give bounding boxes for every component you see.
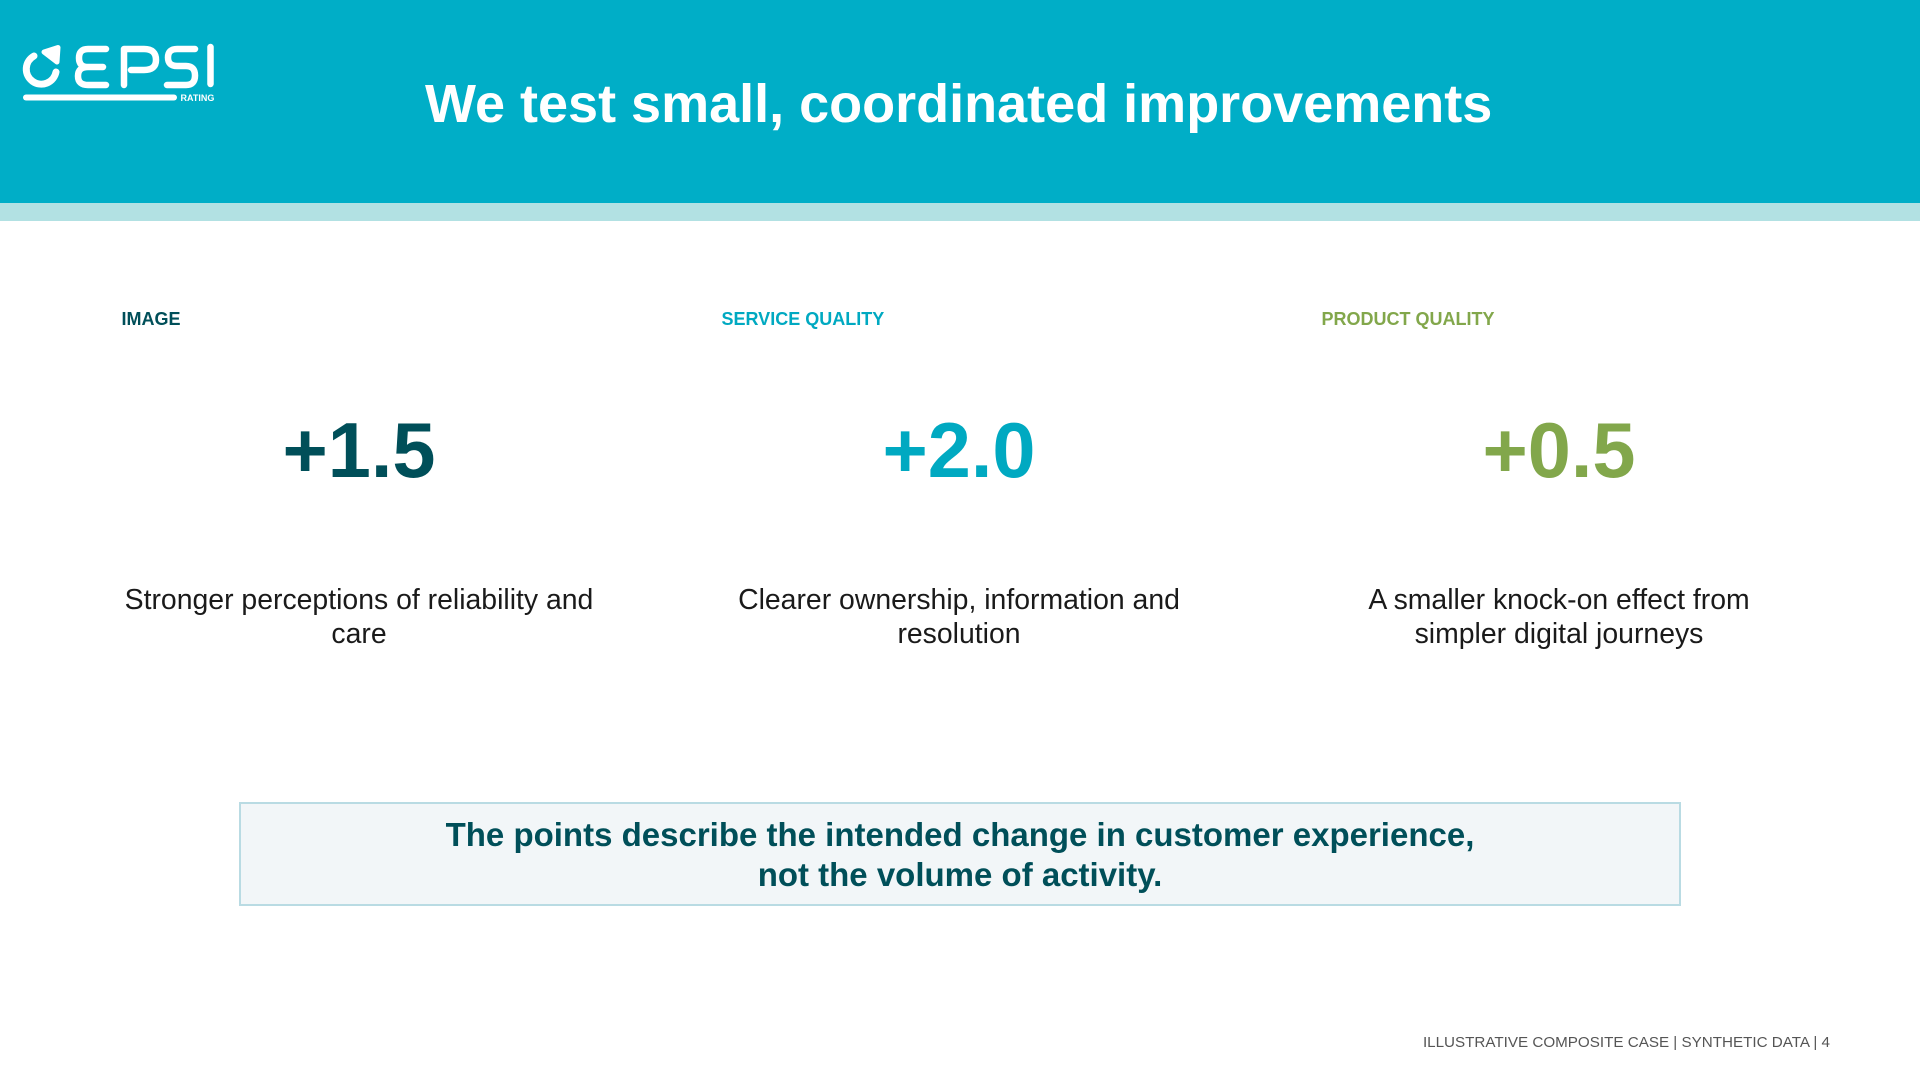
callout: The points describe the intended change in customer experience, [446, 816, 1474, 853]
image value: +1.5 [282, 408, 436, 494]
product quality description: A smaller knock-on effect from [1368, 584, 1750, 616]
image description: Stronger perceptions of reliability and [125, 584, 593, 616]
service quality label: SERVICE QUALITY [722, 309, 884, 329]
callout [239, 802, 1681, 906]
image description: care [331, 618, 387, 650]
title: We test small, coordinated improvements [425, 74, 1492, 134]
callout: not the volume of activity. [758, 856, 1162, 893]
service quality description [738, 584, 1180, 650]
image label: IMAGE [122, 309, 181, 329]
icon: logo mark [26, 48, 58, 84]
service quality description: Clearer ownership, information and [738, 584, 1180, 616]
footer: ILLUSTRATIVE COMPOSITE CASE | SYNTHETIC DATA | 4 [1423, 1034, 1830, 1051]
product quality label: PRODUCT QUALITY [1322, 309, 1494, 329]
product quality value: +0.5 [1482, 408, 1636, 494]
service quality description: resolution [897, 618, 1021, 650]
product quality description: simpler digital journeys [1415, 618, 1703, 650]
image description [125, 584, 593, 650]
logo [22, 44, 214, 103]
header band [0, 0, 1920, 221]
product quality description [1368, 584, 1750, 650]
logo rating text: RATING [180, 93, 214, 103]
logo letters [26, 47, 210, 98]
service quality value: +2.0 [882, 408, 1036, 494]
